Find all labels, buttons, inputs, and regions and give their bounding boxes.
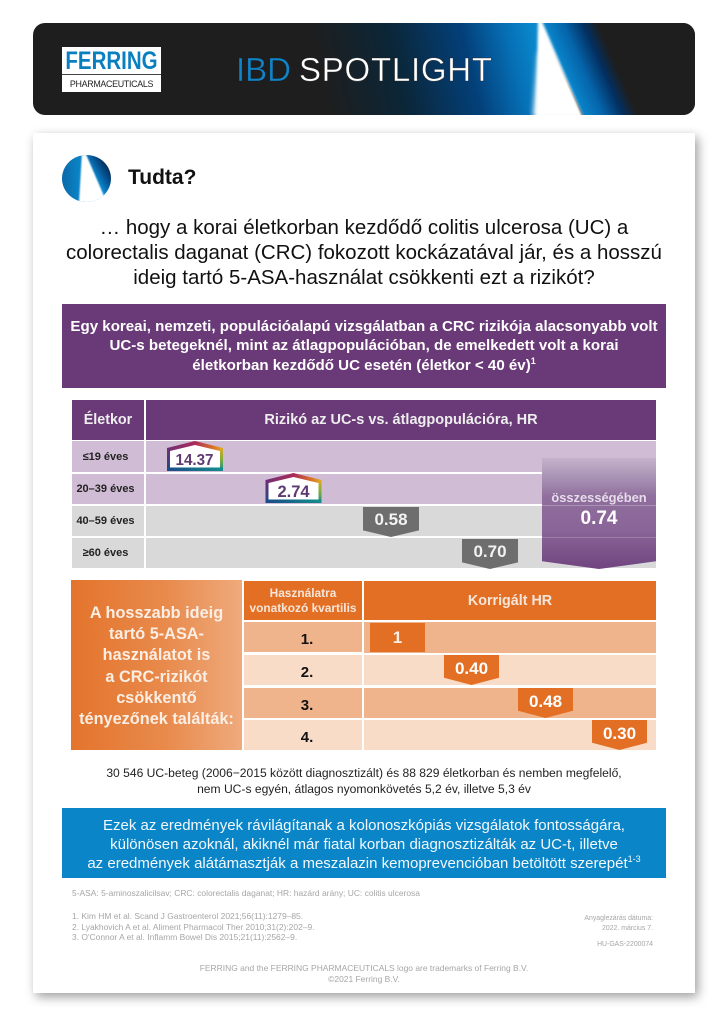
badge 0.70 (462, 539, 518, 569)
badge 0.70: 0.70 (473, 542, 507, 560)
references: 3. O'Connor A et al. Inflamm Bowel Dis 2015;21(11):2562–9. (72, 932, 297, 942)
header: age (72, 400, 144, 440)
references: 1. Kim HM et al. Scand J Gastroenterol 2021;56(11):1279–85. (72, 911, 303, 921)
row divider over callout (542, 505, 656, 506)
quartile 3: 3. (301, 697, 313, 714)
HR table: quartiles (244, 581, 656, 750)
badge 1: 1 (393, 628, 402, 646)
badge 0.48 (518, 688, 573, 718)
references (72, 911, 314, 942)
Ferring logo: FERRING (65, 47, 158, 75)
intro question: colorectalis daganat (CRC) fokozott kockázatával jár, és a hosszú (66, 241, 662, 264)
overall HR callout: 0.74 (580, 508, 617, 529)
header: quartile: Használatra (270, 586, 336, 600)
orange panel: 5-ASA statement: tartó 5-ASA- (109, 625, 204, 643)
quartile 2 (244, 655, 362, 685)
trademark note: ©2021 Ferring B.V. (328, 974, 400, 984)
approval date and code: 2022. március 7. (602, 924, 653, 932)
heading: Tudta?: Tudta? (128, 166, 196, 189)
quartile 1: 1. (301, 631, 313, 648)
quartile 1 (244, 622, 362, 652)
orange panel: 5-ASA statement: használatot is (103, 646, 210, 664)
intro question: … hogy a korai életkorban kezdődő colitis ulcerosa (UC) a (100, 216, 628, 239)
approval date and code (584, 914, 653, 948)
band 2 (364, 655, 656, 685)
badge 0.58: 0.58 (374, 510, 408, 528)
row band ≤19 (146, 441, 656, 472)
row label ≥60 (72, 538, 144, 568)
row label ≥60: ≥60 éves (83, 547, 128, 559)
purple summary box: Egy koreai, nemzeti, populációalapú vizsgálatban a CRC rizikója alacsonyabb volt (70, 318, 658, 335)
header banner (33, 23, 695, 115)
badge 0.40: 0.40 (455, 658, 488, 678)
trademark note: FERRING and the FERRING PHARMACEUTICALS logo are trademarks of Ferring B.V. (200, 963, 528, 973)
row band ≥60 (146, 538, 656, 568)
header: age: Életkor (84, 412, 132, 428)
purple summary box: UC-s betegeknél, mint az átlagpopulációban, de emelkedett volt a korai (109, 337, 619, 354)
quartile 2: 2. (301, 664, 313, 681)
blue conclusion box: Ezek az eredmények rávilágítanak a kolonoszkópiás vizsgálatok fontosságára, (103, 817, 625, 834)
blue conclusion box (62, 808, 666, 878)
row label ≤19 (72, 441, 144, 472)
trademark note (200, 963, 528, 984)
header: quartile: vonatkozó kvartilis (249, 601, 357, 615)
quartile 3 (244, 688, 362, 718)
study population note: nem UC-s egyén, átlagos nyomonkövetés 5,2 év, illetve 5,3 év (197, 782, 531, 796)
orange panel: 5-ASA statement (71, 580, 242, 750)
Ferring logo (62, 47, 161, 92)
header gradient and light beam (332, 23, 695, 115)
badge 1 (370, 623, 425, 652)
references: 2. Lyakhovich A et al. Aliment Pharmacol Ther 2010;31(2):202–9. (72, 922, 314, 932)
icon: light beam circle (62, 155, 111, 202)
approval date and code: Anyaglezárás dátuma: (584, 915, 653, 922)
intro question (66, 216, 662, 289)
quartile 4: 4. (301, 729, 313, 746)
overall HR callout: összességében (551, 490, 647, 505)
badge 14.37: 14.37 (176, 452, 214, 469)
blue conclusion box: különösen azoknál, akiknél már fiatal korban diagnosztizálták az UC-t, illetve (110, 836, 618, 853)
band 1 (364, 622, 656, 653)
row label 20–39 (72, 474, 144, 504)
row label 40–59 (72, 506, 144, 536)
orange panel: 5-ASA statement: tényezőnek találták: (79, 710, 234, 728)
band 4 (364, 720, 656, 750)
badge 0.30: 0.30 (603, 724, 636, 742)
badge 0.40 (444, 655, 499, 685)
row band 40–59 (146, 506, 656, 536)
badge 2.74 (266, 473, 322, 503)
badge 14.37 (167, 441, 223, 471)
approval date and code: HU-GAS-2200074 (597, 941, 653, 948)
header: quartile (244, 581, 362, 620)
row label 20–39: 20–39 éves (76, 483, 135, 495)
blue conclusion box: az eredmények alátámasztják a meszalazin kemoprevencióban betöltött szerepét1-3 (87, 854, 641, 872)
row label 40–59: 40–59 éves (76, 515, 135, 527)
orange panel: 5-ASA statement: csökkentő (116, 689, 197, 707)
badge 2.74: 2.74 (277, 483, 310, 501)
badge 0.58 (363, 507, 419, 537)
IBD Spotlight title: IBDSPOTLIGHT (236, 51, 493, 88)
orange panel: 5-ASA statement: A hosszabb ideig (90, 604, 223, 622)
header: risk: Rizikó az UC-s vs. átlagpopulációra, HR (264, 412, 538, 428)
overall HR callout (542, 458, 656, 569)
band 3 (364, 688, 656, 718)
header: adjusted HR (364, 581, 656, 620)
purple summary box: életkorban kezdődő UC esetén (életkor < 40 év)1 (192, 356, 536, 374)
abbreviations: 5-ASA: 5-aminoszalicilsav; CRC: colorectalis daganat; HR: hazárd arány; UC: colitis ulcerosa (72, 888, 420, 898)
row band 20–39 (146, 474, 656, 504)
quartile 4 (244, 720, 362, 750)
badge 0.48: 0.48 (529, 692, 562, 710)
study population note: 30 546 UC-beteg (2006−2015 között diagnosztizált) és 88 829 életkorban és nemben megfelelő, (106, 766, 622, 780)
header: risk (146, 400, 656, 440)
risk table: age and HR (72, 400, 656, 568)
purple summary box (62, 304, 666, 388)
badge 0.30 (592, 720, 647, 750)
header: adjusted HR: Korrigált HR (468, 592, 552, 608)
row label ≤19: ≤19 éves (83, 450, 128, 462)
Ferring logo: PHARMACEUTICALS (70, 78, 153, 88)
orange panel: 5-ASA statement: a CRC-rizikót (105, 668, 208, 686)
intro question: ideig tartó 5-ASA-használat csökkenti ezt a rizikót? (133, 266, 595, 289)
content card (33, 133, 695, 993)
study population note (106, 766, 622, 796)
